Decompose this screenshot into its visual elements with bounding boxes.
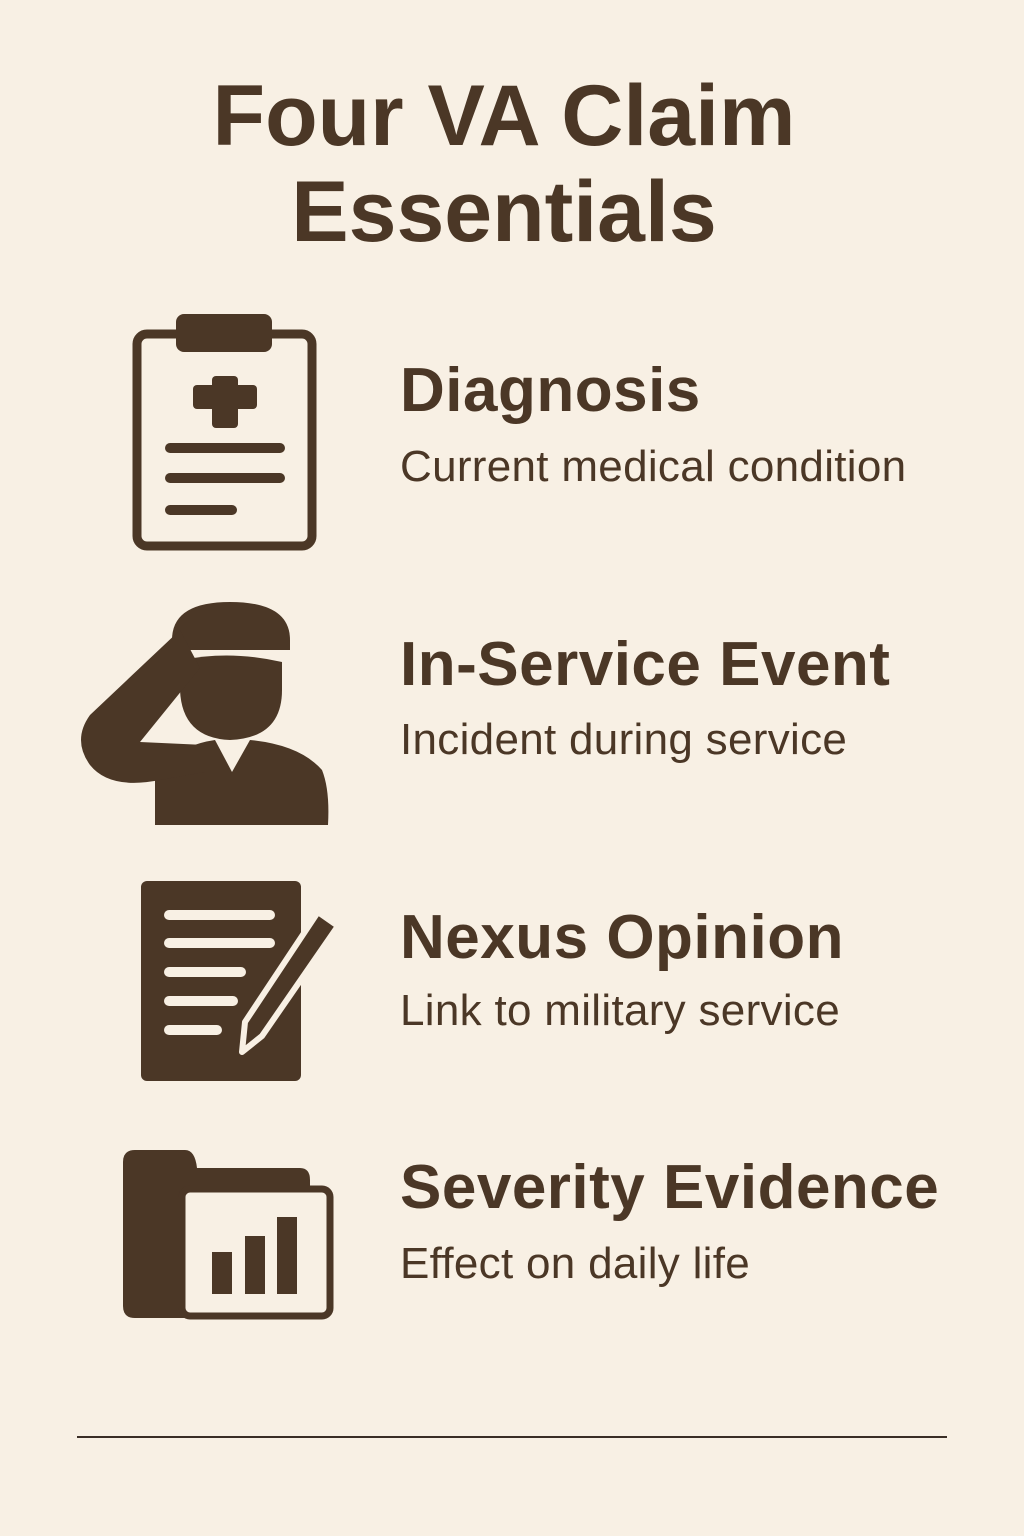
heading: In-Service Event: In-Service Event (400, 630, 890, 699)
icon: saluting soldier (81, 602, 328, 825)
title: Four VA Claim (213, 68, 795, 164)
subtext: nexus: Link to military service (400, 986, 840, 1035)
heading: Diagnosis: Diagnosis (400, 356, 701, 425)
title (213, 68, 795, 260)
heading: Severity Evidence: Severity Evidence (400, 1153, 939, 1222)
subtext: in-service: Incident during service (400, 715, 847, 764)
title: Essentials (291, 164, 717, 260)
subtext: diagnosis: Current medical condition (400, 442, 906, 491)
heading: Nexus Opinion: Nexus Opinion (400, 903, 844, 972)
icon: folder with chart (123, 1150, 330, 1318)
icon: clipboard (137, 314, 312, 546)
icon: document with pen (141, 881, 338, 1081)
subtext: severity: Effect on daily life (400, 1239, 750, 1288)
